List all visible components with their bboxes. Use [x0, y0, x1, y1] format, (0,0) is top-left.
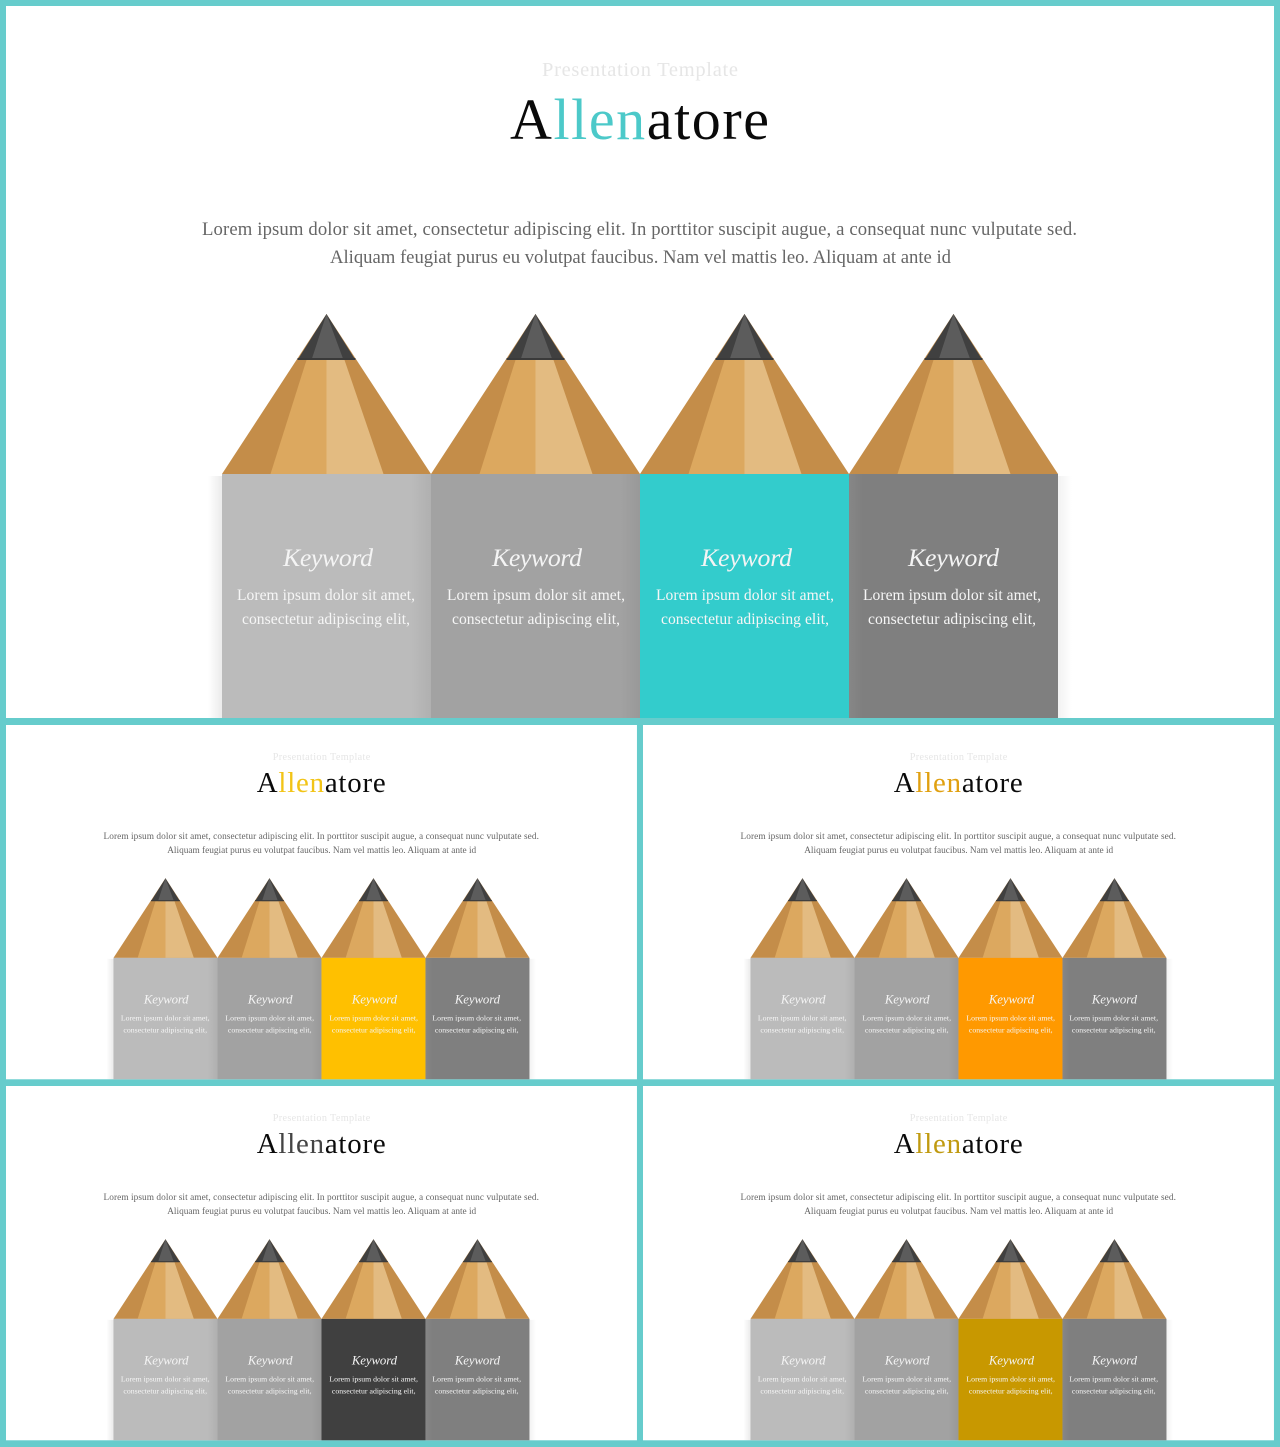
intro text: Aliquam feugiat purus eu volutpat faucibus. Nam vel mattis leo. Aliquam at ante id [804, 845, 1114, 856]
card 1: Keyword [780, 1354, 826, 1368]
intro text: Aliquam feugiat purus eu volutpat faucibus. Nam vel mattis leo. Aliquam at ante id [167, 845, 477, 856]
card 2 [217, 958, 321, 1079]
subtitle: Presentation Template [273, 752, 371, 763]
card 4: Lorem ipsum dolor sit amet, [863, 587, 1041, 604]
card 3 accent: Keyword [988, 1354, 1035, 1368]
intro text [104, 832, 539, 856]
card 4 [1062, 958, 1173, 1079]
card 4: Keyword [454, 993, 501, 1007]
subtitle: Presentation Template [273, 1113, 371, 1124]
card 4: Keyword [1091, 1354, 1138, 1368]
icon: pencil tip 4 [1062, 878, 1166, 958]
intro text [202, 219, 1077, 268]
card 3 accent: consectetur adipiscing elit, [332, 1026, 416, 1035]
card 3 accent: consectetur adipiscing elit, [332, 1387, 416, 1396]
card 3 accent [958, 1319, 1062, 1440]
subtitle: Presentation Template [542, 59, 738, 81]
intro text [741, 1193, 1176, 1217]
intro text [104, 1193, 539, 1217]
card 1: consectetur adipiscing elit, [242, 611, 410, 628]
card 2 [854, 958, 958, 1079]
card 2 [431, 474, 640, 718]
panel: main teal slide [6, 6, 1274, 718]
card 2: Keyword [884, 993, 930, 1007]
card 2: consectetur adipiscing elit, [228, 1026, 312, 1035]
card 3 accent [321, 1319, 425, 1440]
card 3 accent: consectetur adipiscing elit, [969, 1387, 1053, 1396]
card 1: consectetur adipiscing elit, [760, 1387, 844, 1396]
intro text: Lorem ipsum dolor sit amet, consectetur adipiscing elit. In porttitor suscipit augue, a consequat nunc vulputate sed. [104, 832, 539, 842]
card 1 [208, 474, 431, 718]
card 1: consectetur adipiscing elit, [123, 1026, 207, 1035]
card 4: Keyword [907, 543, 999, 572]
card 1: Lorem ipsum dolor sit amet, [758, 1375, 847, 1384]
subtitle: Presentation Template [910, 1113, 1008, 1124]
card 1: Keyword [143, 993, 189, 1007]
card 3 accent: consectetur adipiscing elit, [661, 611, 829, 628]
icon: pencil tip 2 [217, 878, 321, 958]
card 2: consectetur adipiscing elit, [228, 1387, 312, 1396]
intro text [741, 832, 1176, 856]
icon: pencil tip 1 [113, 1239, 217, 1319]
icon: pencil tip 4 [849, 314, 1058, 474]
subtitle: Presentation Template [910, 752, 1008, 763]
card 4: Lorem ipsum dolor sit amet, [1069, 1375, 1158, 1384]
intro text: Lorem ipsum dolor sit amet, consectetur adipiscing elit. In porttitor suscipit augue, a consequat nunc vulputate sed. [104, 1193, 539, 1203]
card 2 [217, 1319, 321, 1440]
card 4: Lorem ipsum dolor sit amet, [1069, 1014, 1158, 1023]
icon: pencil tip 3 [321, 1239, 425, 1319]
card 2: Keyword [247, 1354, 293, 1368]
card 4: Keyword [1091, 993, 1138, 1007]
title: Allenatore [257, 1128, 386, 1160]
card 1 [107, 958, 217, 1079]
card 3 accent [640, 474, 849, 718]
card 4: consectetur adipiscing elit, [1072, 1026, 1156, 1035]
card 3 accent: Keyword [351, 1354, 398, 1368]
card 3 accent: Keyword [700, 543, 792, 572]
card 4 [849, 474, 1072, 718]
card 1: Keyword [780, 993, 826, 1007]
icon: pencil tip 3 [958, 878, 1062, 958]
icon: pencil tip 1 [222, 314, 431, 474]
card 2: Keyword [884, 1354, 930, 1368]
card 4 [425, 1319, 536, 1440]
icon: pencil tip 1 [750, 1239, 854, 1319]
card 3 accent: Lorem ipsum dolor sit amet, [329, 1375, 418, 1384]
card 3 accent [958, 958, 1062, 1079]
intro text: Aliquam feugiat purus eu volutpat faucibus. Nam vel mattis leo. Aliquam at ante id [167, 1206, 477, 1217]
card 4 [425, 958, 536, 1079]
card 1: Lorem ipsum dolor sit amet, [237, 587, 415, 604]
card 2: Lorem ipsum dolor sit amet, [225, 1375, 314, 1384]
card 1: Lorem ipsum dolor sit amet, [758, 1014, 847, 1023]
intro text: Aliquam feugiat purus eu volutpat faucibus. Nam vel mattis leo. Aliquam at ante id [804, 1206, 1114, 1217]
card 4: Lorem ipsum dolor sit amet, [432, 1014, 521, 1023]
card 2: consectetur adipiscing elit, [452, 611, 620, 628]
icon: pencil tip 2 [431, 314, 640, 474]
icon: pencil tip 3 [321, 878, 425, 958]
title: Allenatore [257, 767, 386, 799]
card 2: Lorem ipsum dolor sit amet, [225, 1014, 314, 1023]
icon: pencil tip 4 [425, 878, 529, 958]
card 1: consectetur adipiscing elit, [123, 1387, 207, 1396]
card 2: Lorem ipsum dolor sit amet, [447, 587, 625, 604]
card 3 accent: Keyword [988, 993, 1035, 1007]
card 1: Lorem ipsum dolor sit amet, [121, 1375, 210, 1384]
card 4: consectetur adipiscing elit, [435, 1026, 519, 1035]
intro text: Lorem ipsum dolor sit amet, consectetur adipiscing elit. In porttitor suscipit augue, a consequat nunc vulputate sed. [741, 832, 1176, 842]
icon: pencil tip 1 [113, 878, 217, 958]
card 2: Keyword [491, 543, 582, 572]
icon: pencil tip 4 [1062, 1239, 1166, 1319]
card 4: Lorem ipsum dolor sit amet, [432, 1375, 521, 1384]
icon: pencil tip 4 [425, 1239, 529, 1319]
icon: pencil tip 2 [854, 878, 958, 958]
card 4 [1062, 1319, 1173, 1440]
card 1 [107, 1319, 217, 1440]
intro text: Lorem ipsum dolor sit amet, consectetur adipiscing elit. In porttitor suscipit augue, a consequat nunc vulputate sed. [741, 1193, 1176, 1203]
icon: pencil tip 3 [958, 1239, 1062, 1319]
card 3 accent: Lorem ipsum dolor sit amet, [966, 1014, 1055, 1023]
intro text: Aliquam feugiat purus eu volutpat faucibus. Nam vel mattis leo. Aliquam at ante id [330, 247, 952, 268]
card 1: consectetur adipiscing elit, [760, 1026, 844, 1035]
card 1 [744, 1319, 854, 1440]
card 3 accent [321, 958, 425, 1079]
card 3 accent: Lorem ipsum dolor sit amet, [329, 1014, 418, 1023]
card 2 [854, 1319, 958, 1440]
card 3 accent: Keyword [351, 993, 398, 1007]
card 1 [744, 958, 854, 1079]
panel: orange slide [643, 725, 1274, 1079]
card 4: Keyword [454, 1354, 501, 1368]
card 4: consectetur adipiscing elit, [1072, 1387, 1156, 1396]
title: Allenatore [510, 87, 769, 152]
icon: pencil tip 2 [854, 1239, 958, 1319]
panel: ochre slide [643, 1086, 1274, 1440]
card 4: consectetur adipiscing elit, [868, 611, 1036, 628]
card 2: consectetur adipiscing elit, [865, 1387, 949, 1396]
intro text: Lorem ipsum dolor sit amet, consectetur adipiscing elit. In porttitor suscipit augue, a consequat nunc vulputate sed. [202, 219, 1077, 240]
card 4: consectetur adipiscing elit, [435, 1387, 519, 1396]
icon: pencil tip 2 [217, 1239, 321, 1319]
icon: pencil tip 3 [640, 314, 849, 474]
card 1: Keyword [282, 543, 373, 572]
icon: pencil tip 1 [750, 878, 854, 958]
card 2: Lorem ipsum dolor sit amet, [862, 1375, 951, 1384]
card 2: Keyword [247, 993, 293, 1007]
title: Allenatore [894, 767, 1023, 799]
title: Allenatore [894, 1128, 1023, 1160]
card 2: Lorem ipsum dolor sit amet, [862, 1014, 951, 1023]
card 3 accent: consectetur adipiscing elit, [969, 1026, 1053, 1035]
card 1: Keyword [143, 1354, 189, 1368]
panel: charcoal slide [6, 1086, 637, 1440]
card 1: Lorem ipsum dolor sit amet, [121, 1014, 210, 1023]
card 2: consectetur adipiscing elit, [865, 1026, 949, 1035]
panel: yellow slide [6, 725, 637, 1079]
card 3 accent: Lorem ipsum dolor sit amet, [966, 1375, 1055, 1384]
card 3 accent: Lorem ipsum dolor sit amet, [656, 587, 834, 604]
